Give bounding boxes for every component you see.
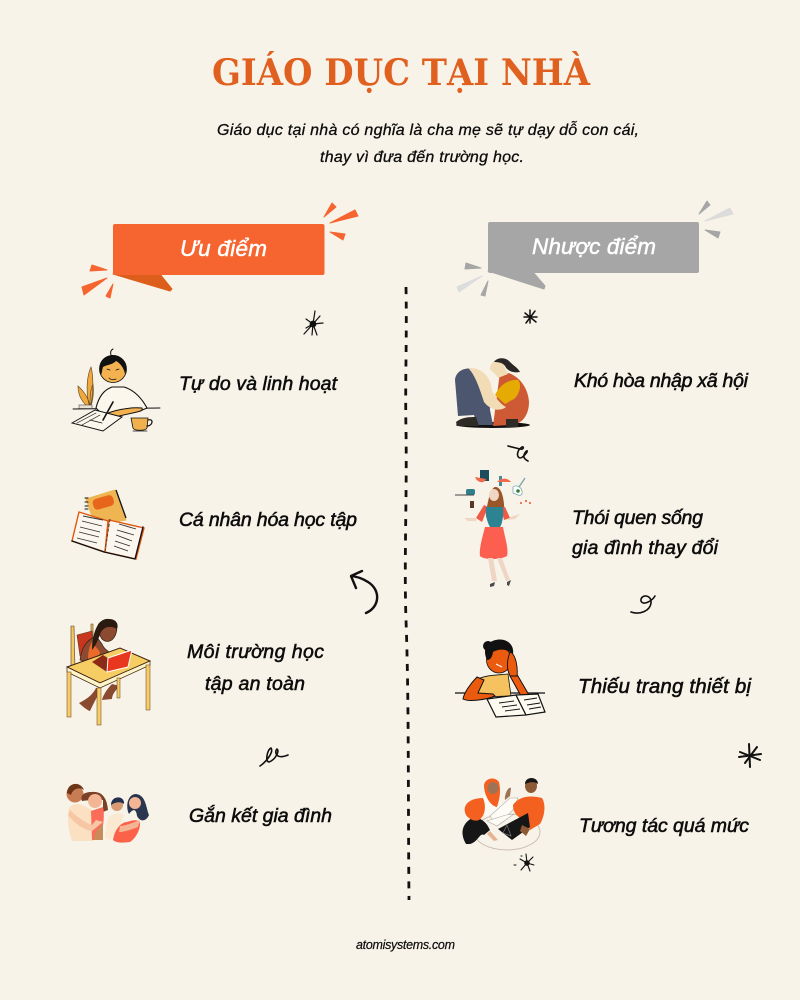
item: personalised learning [72, 490, 357, 559]
label [187, 641, 324, 695]
title: GIÁO DỤC TẠI NHÀ [212, 52, 591, 94]
label: gia đình thay đổi [572, 537, 719, 559]
item: freedom and flexibility [72, 349, 339, 431]
label: Tự do và linh hoạt [179, 373, 339, 395]
label: Thiếu trang thiết bị [578, 675, 752, 698]
banner: disadvantages [457, 201, 733, 296]
label: Khó hòa nhập xã hội [574, 370, 749, 392]
center dashed divider [405, 287, 409, 900]
icon: boy writing [72, 349, 160, 431]
icon: mother juggling chores [455, 470, 531, 587]
item: changed family habits [455, 470, 719, 587]
doodle: star right [739, 744, 761, 767]
icon: student thinking over book [455, 640, 545, 717]
doodle: squiggle near juggling woman [508, 446, 528, 461]
icon: girl at desk with laptop [67, 619, 150, 725]
icon: curved arrow [351, 571, 377, 613]
item: family bonding [66, 784, 332, 843]
icon: family group [66, 784, 149, 843]
label: Tương tác quá mức [579, 815, 749, 837]
intro text: Giáo dục tại nhà có nghĩa là cha mẹ sẽ tự dạy dỗ con cái, [217, 120, 639, 139]
doodle: squiggle right [631, 596, 655, 613]
footer: website: atomisystems.com [356, 938, 455, 952]
intro text [217, 120, 639, 166]
banner: advantages [82, 203, 358, 298]
label: Cá nhân hóa học tập [179, 509, 357, 531]
label: Thói quen sống [572, 507, 703, 529]
doodle: star top right [524, 310, 537, 323]
item: difficult socialising [455, 358, 749, 428]
doodle: sparkle top left [304, 311, 323, 335]
doodle: squiggle left [260, 748, 288, 766]
banner: advantages: Ưu điểm [180, 236, 267, 261]
label [572, 507, 719, 559]
item: excessive interaction [463, 778, 749, 850]
intro text: thay vì đưa đến trường học. [320, 149, 524, 166]
label: Môi trường học [187, 641, 324, 663]
item: safe learning environment [67, 619, 324, 725]
label: Gắn kết gia đình [189, 804, 332, 827]
label: tập an toàn [205, 673, 305, 695]
icon: three people around table [463, 778, 544, 850]
icon: open notebook [72, 490, 144, 559]
banner: disadvantages: Nhược điểm [532, 234, 656, 259]
icon: seated sad person [455, 358, 530, 428]
doodle: sparkle bottom [514, 854, 534, 871]
item: lack of equipment [455, 640, 752, 717]
